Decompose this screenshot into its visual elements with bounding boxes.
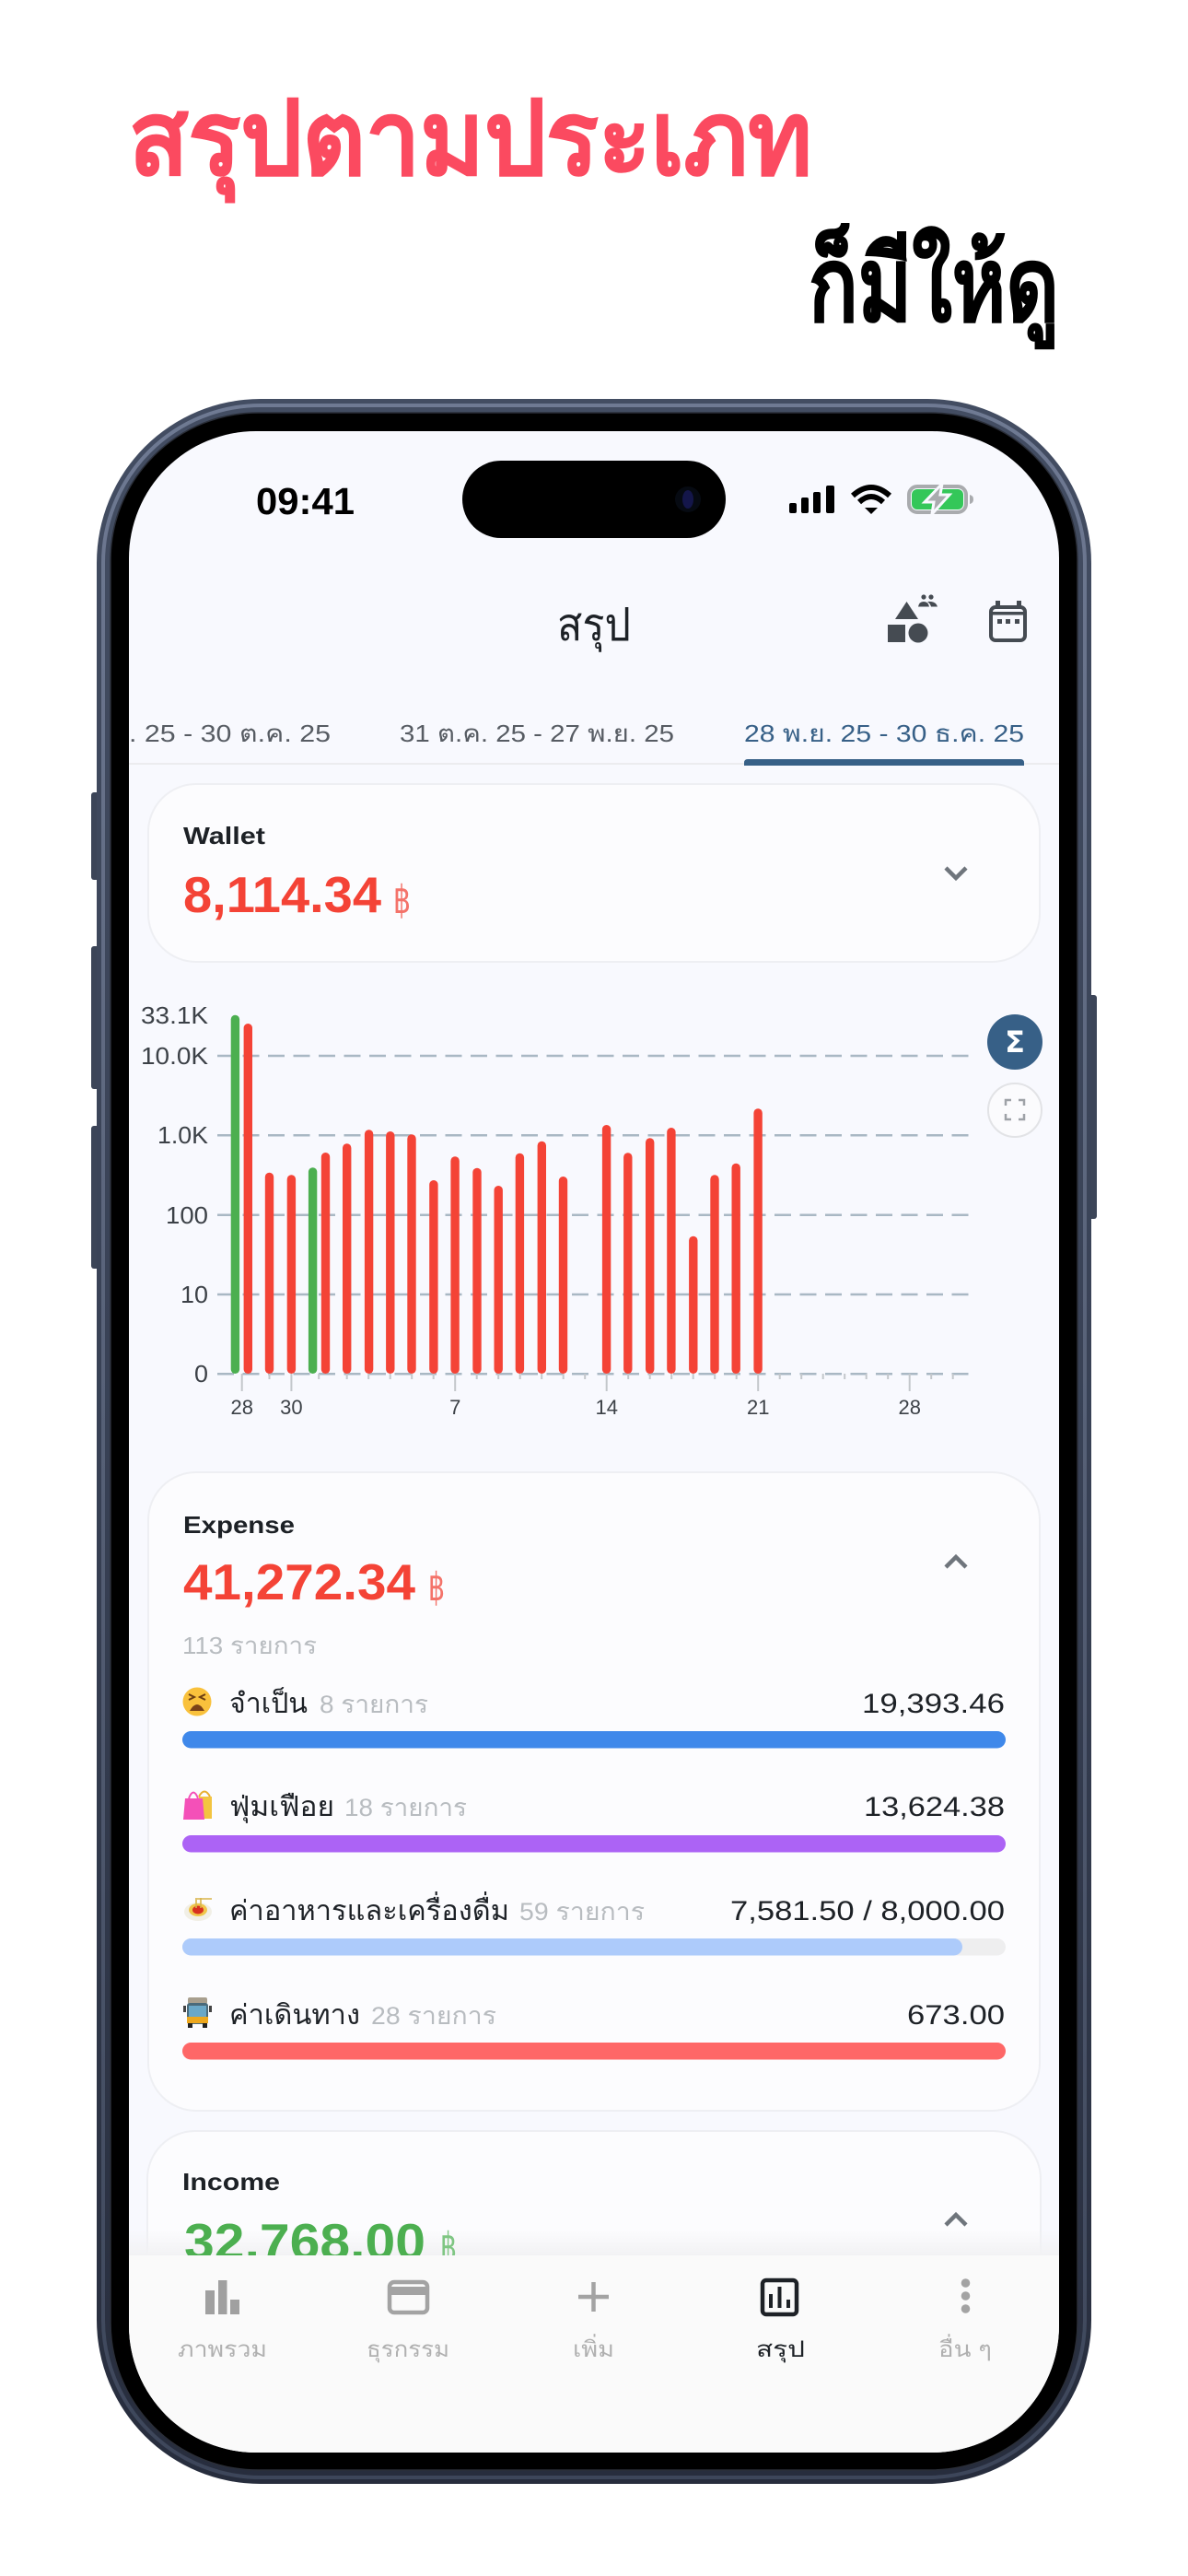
x axis labels: 28 xyxy=(230,1396,253,1419)
nav: add xyxy=(573,2282,614,2362)
row: luxury: 13,624.38 xyxy=(864,1792,1005,1822)
y axis labels xyxy=(141,1001,209,1388)
button: sum toggle xyxy=(987,1014,1042,1070)
y axis labels: 100 xyxy=(166,1201,208,1229)
row: luxury: ฟุ่มเฟือย xyxy=(229,1792,334,1824)
y axis labels: 33.1K xyxy=(141,1001,209,1029)
icon: shopping bags emoji xyxy=(183,1791,212,1820)
screen title: สรุป xyxy=(557,601,631,652)
row: necessary: จำเป็น xyxy=(229,1686,308,1719)
wallet amount: 8,114.34 xyxy=(183,866,381,923)
nav: overview xyxy=(178,2280,267,2362)
icon: chevron up xyxy=(946,2215,966,2225)
x axis labels: 21 xyxy=(747,1396,769,1419)
title xyxy=(129,81,1059,347)
income bars xyxy=(231,1015,317,1374)
x axis labels: 7 xyxy=(449,1396,460,1419)
row: luxury xyxy=(182,1791,1006,1852)
tab: middle period: 31 ต.ค. 25 - 27 พ.ย. 25 xyxy=(400,720,674,747)
icon: spaghetti emoji xyxy=(184,1898,212,1921)
expense bars xyxy=(244,1024,763,1374)
baht sign: ฿ xyxy=(428,1565,445,1609)
row: food and drink: 7,581.50 / 8,000.00 xyxy=(730,1896,1005,1926)
nav: add: เพิ่ม xyxy=(573,2334,614,2362)
row: food and drink xyxy=(182,1891,1006,1955)
icon: chevron down xyxy=(946,868,966,878)
x axis labels xyxy=(232,1400,920,1414)
status bar time: 09:41 xyxy=(256,480,355,522)
icon: chevron up xyxy=(946,1557,966,1567)
phone mockup xyxy=(91,399,1097,2484)
y axis labels: 10.0K xyxy=(141,1042,209,1070)
button: sum toggle: Σ xyxy=(1005,1025,1025,1060)
headline: summary by category: สรุปตามประเภท xyxy=(129,81,812,202)
nav: transactions xyxy=(367,2282,449,2363)
x axis labels: 28 xyxy=(898,1396,921,1419)
y axis labels: 1.0K xyxy=(157,1121,209,1149)
expense label: Expense xyxy=(183,1511,295,1539)
income label: Income xyxy=(182,2168,280,2195)
x axis ticks xyxy=(242,1374,953,1391)
row: food and drink: ค่าอาหารและเครื่องดื่ม xyxy=(229,1891,509,1926)
phone frame xyxy=(97,399,1091,2484)
icon: charging battery xyxy=(909,484,973,514)
nav: more: อื่น ๆ xyxy=(938,2334,992,2362)
row: necessary xyxy=(182,1686,1006,1749)
tab: selected period: 28 พ.ย. 25 - 30 ธ.ค. 25 xyxy=(744,720,1024,747)
row: luxury: 18 รายการ xyxy=(344,1794,467,1821)
icon: weary face emoji xyxy=(182,1688,212,1715)
icon: bus emoji xyxy=(183,1997,212,2028)
infographic: summary by category xyxy=(91,98,1097,2484)
row: necessary: 19,393.46 xyxy=(862,1689,1005,1719)
baht sign: ฿ xyxy=(440,2225,457,2268)
icon: wifi xyxy=(853,487,890,514)
app screen xyxy=(129,431,1059,2453)
x axis labels: 30 xyxy=(280,1396,303,1419)
nav: more xyxy=(938,2278,992,2362)
row: transport: 673.00 xyxy=(907,2000,1005,2031)
nav: overview: ภาพรวม xyxy=(178,2337,267,2362)
income amount: 32,768.00 xyxy=(184,2213,425,2270)
row: food and drink: 59 รายการ xyxy=(519,1898,645,1926)
row: necessary: 8 รายการ xyxy=(320,1691,428,1718)
dynamic island xyxy=(462,461,726,538)
selected tab underline xyxy=(744,759,1024,766)
y axis labels: 10 xyxy=(181,1281,208,1308)
button: fullscreen xyxy=(988,1083,1042,1137)
baht sign: ฿ xyxy=(393,878,411,921)
tab: previous period: . 25 - 30 ต.ค. 25 xyxy=(129,720,331,747)
bottom nav shadow xyxy=(129,2230,1059,2255)
period tabs xyxy=(129,724,1059,766)
icon: calendar xyxy=(991,601,1025,640)
row: transport: ค่าเดินทาง xyxy=(229,2000,360,2031)
phone side buttons xyxy=(91,792,1097,1269)
bottom navigation xyxy=(129,2255,1059,2453)
x axis labels: 14 xyxy=(595,1396,618,1419)
icon: signal xyxy=(789,486,834,513)
nav: transactions: ธุรกรรม xyxy=(367,2337,449,2363)
wallet label: Wallet xyxy=(183,822,265,849)
nav: summary (active) xyxy=(756,2280,805,2363)
y axis labels: 0 xyxy=(194,1360,208,1388)
panel: income xyxy=(129,2131,1059,2407)
icon: category shapes xyxy=(888,594,938,643)
panel: expense xyxy=(148,1472,1040,2111)
row: transport xyxy=(182,1997,1006,2060)
transaction count: 113 รายการ xyxy=(182,1632,317,1659)
expense amount: 41,272.34 xyxy=(183,1553,415,1610)
bar chart xyxy=(141,1001,1042,1419)
panel: wallet xyxy=(148,784,1040,962)
row: transport: 28 รายการ xyxy=(371,2002,496,2030)
subheadline: also available: ก็มีให้ดู xyxy=(809,225,1059,347)
nav: summary (active): สรุป xyxy=(756,2337,805,2363)
